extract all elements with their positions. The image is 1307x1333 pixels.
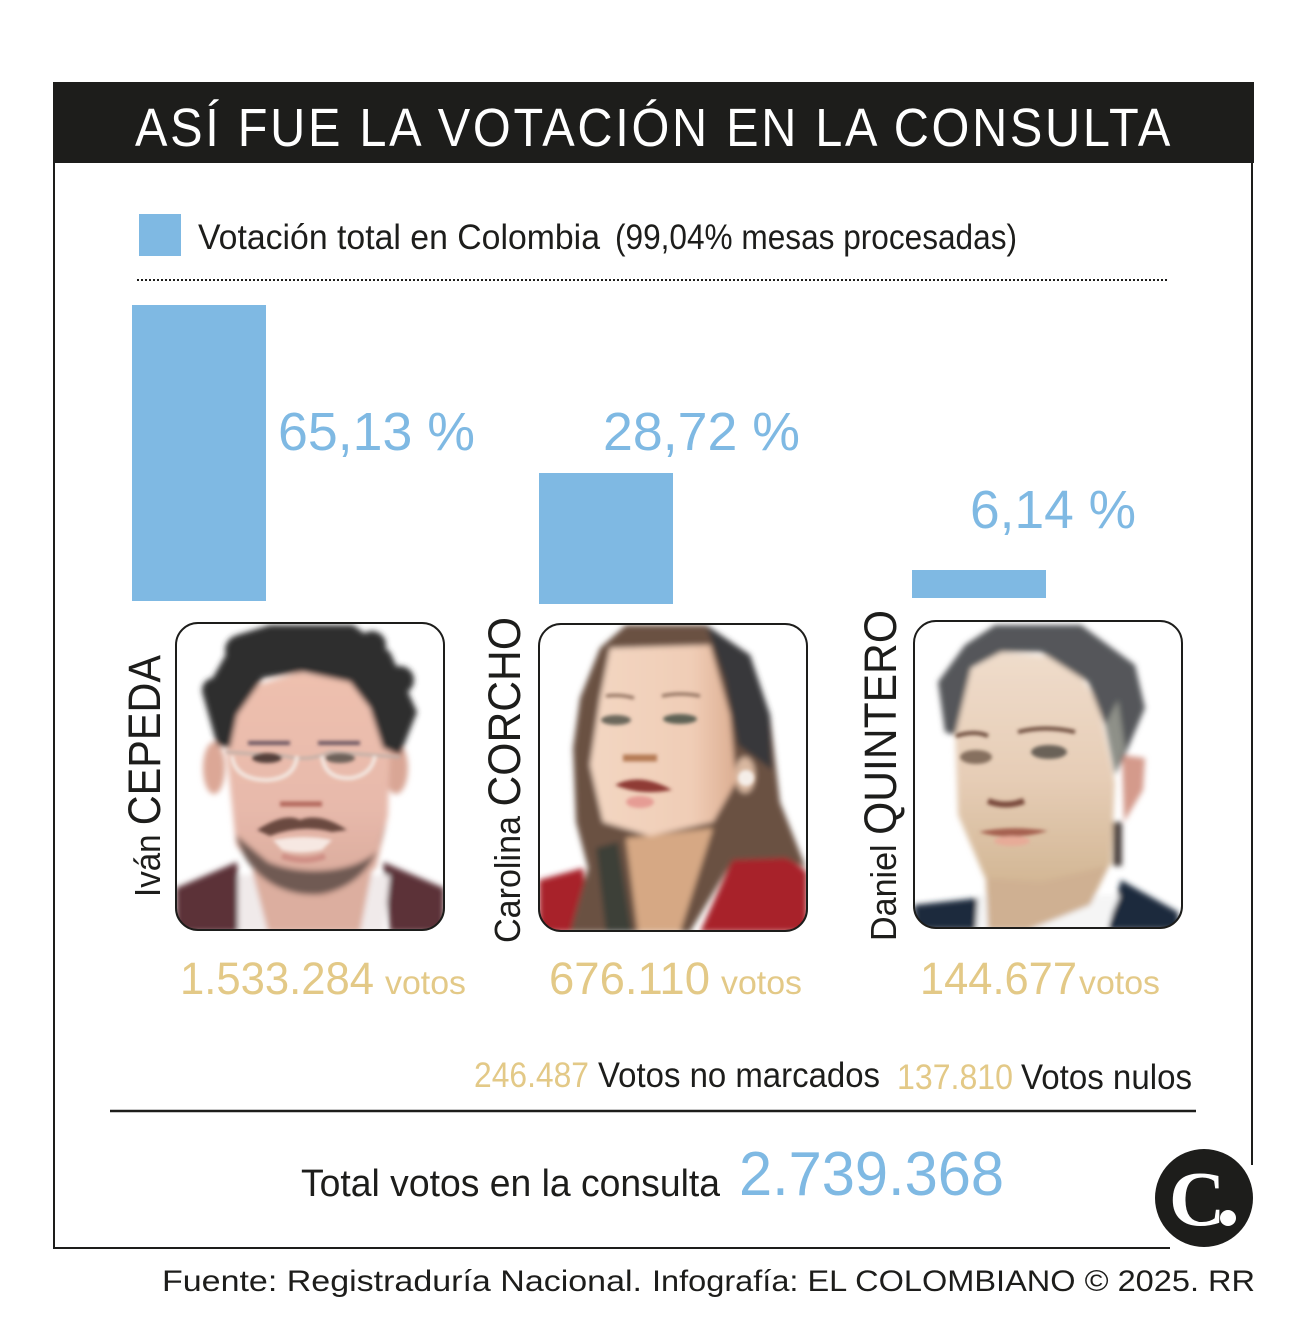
- photo: Carolina Corcho: [539, 624, 807, 932]
- total votes: Total votos en la consulta: [301, 1163, 721, 1205]
- bar: Carolina Corcho: [539, 402, 800, 604]
- votes: Daniel Quintero: votos: [1079, 964, 1160, 1001]
- votes: Iván Cepeda: 1.533.284: [180, 953, 374, 1004]
- bar: Iván Cepeda: [132, 305, 475, 601]
- candidate name: Carolina Corcho: Carolina CORCHO: [479, 617, 530, 943]
- unmarked votes: [474, 1056, 880, 1095]
- candidate name: Daniel Quintero: Daniel QUINTERO: [855, 610, 906, 941]
- legend: [139, 214, 1017, 257]
- source: Fuente: Registraduría Nacional.: [162, 1265, 642, 1298]
- null votes: [897, 1058, 1192, 1097]
- source: [162, 1265, 1255, 1298]
- null votes: Votos nulos: [1021, 1058, 1192, 1097]
- photo: Iván Cepeda: [176, 623, 444, 932]
- votes: Daniel Quintero: [920, 953, 1160, 1004]
- total votes: 2.739.368: [739, 1140, 1004, 1209]
- votes: Iván Cepeda: votos: [385, 964, 466, 1001]
- candidate name: Iván Cepeda: Iván CEPEDA: [119, 655, 170, 897]
- logo: El Colombiano: [1155, 1149, 1253, 1247]
- unmarked votes: 246.487: [474, 1056, 589, 1095]
- frame: [54, 160, 1252, 1248]
- legend: (99,04% mesas procesadas): [615, 218, 1017, 257]
- source: Infografía: EL COLOMBIANO © 2025. RR: [652, 1265, 1255, 1298]
- title banner: ASÍ FUE LA VOTACIÓN EN LA CONSULTA: [135, 98, 1173, 158]
- votes: Carolina Corcho: [549, 953, 802, 1004]
- null votes: 137.810: [897, 1058, 1013, 1097]
- unmarked votes: Votos no marcados: [598, 1056, 880, 1095]
- title banner: [53, 82, 1254, 163]
- votes: Carolina Corcho: 676.110: [549, 953, 710, 1004]
- logo: El Colombiano: C: [1169, 1155, 1225, 1242]
- bar: Daniel Quintero: 6,14 %: [970, 480, 1136, 540]
- photo: Daniel Quintero: [914, 621, 1182, 930]
- votes: Daniel Quintero: 144.677: [920, 953, 1077, 1004]
- legend: Votación total en Colombia: [198, 218, 601, 257]
- bar: Carolina Corcho: 28,72 %: [603, 402, 800, 462]
- bar: Daniel Quintero: [912, 480, 1136, 598]
- votes: Carolina Corcho: votos: [721, 964, 802, 1001]
- total votes: [301, 1140, 1004, 1209]
- bar: Iván Cepeda: 65,13 %: [278, 402, 475, 462]
